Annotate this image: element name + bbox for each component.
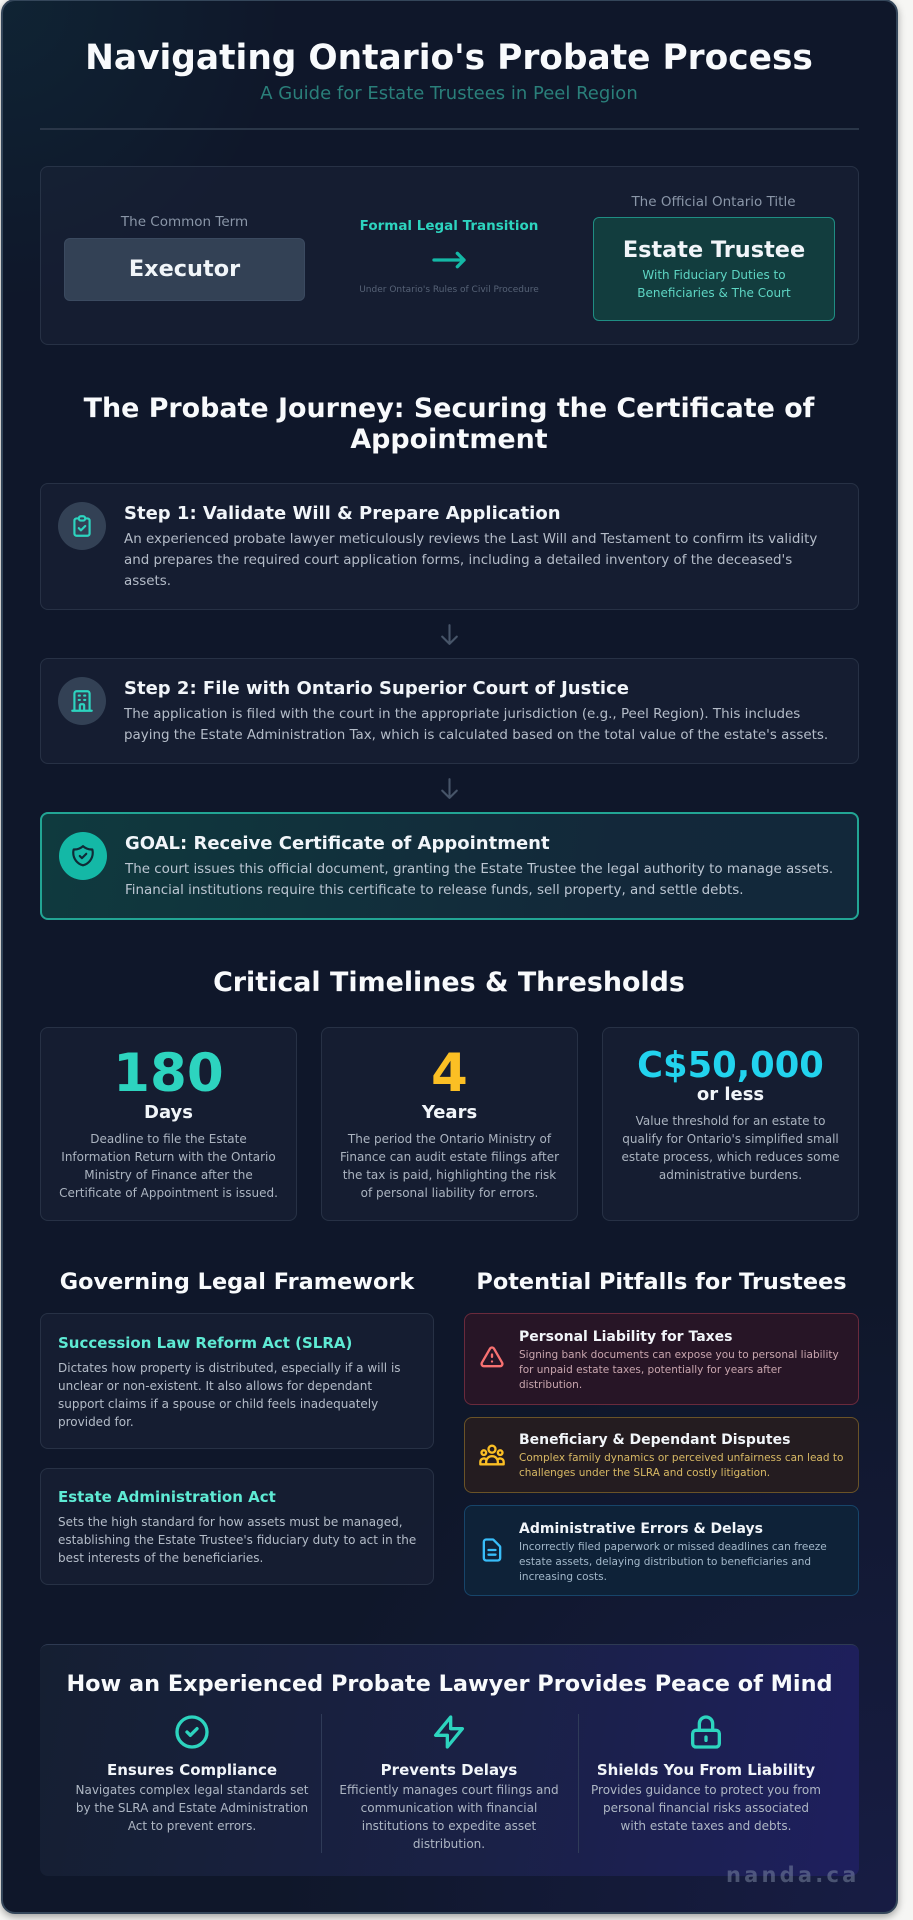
icon: check circle	[175, 1715, 209, 1749]
icon: shield check	[59, 832, 107, 880]
number C$50,000: C$50,000	[637, 1045, 824, 1086]
icon: warning triangle	[480, 1346, 504, 1368]
pitfall text: Incorrectly filed paperwork or missed deadlines can freeze	[519, 1541, 827, 1553]
benefit: ensures compliance	[75, 1715, 309, 1833]
benefit text: distribution.	[413, 1837, 485, 1851]
description: administrative burdens.	[659, 1168, 802, 1182]
unit days: Days	[144, 1102, 193, 1123]
description: Certificate of Appointment is issued.	[59, 1186, 278, 1200]
description: qualify for Ontario's simplified small	[622, 1132, 839, 1146]
icon: lock	[691, 1715, 721, 1749]
step 1 text: An experienced probate lawyer meticulously reviews the Last Will and Testament to confirm its validity	[124, 532, 817, 547]
heading: critical timelines: Critical Timelines & Thresholds	[213, 967, 685, 998]
act title: Estate Administration Act	[58, 1488, 276, 1506]
benefit title: Shields You From Liability	[597, 1761, 815, 1779]
heading: potential pitfalls: Potential Pitfalls for Trustees	[476, 1269, 847, 1295]
pitfall: administrative errors	[464, 1505, 859, 1596]
act text	[58, 1361, 401, 1429]
icon: right arrow	[432, 252, 466, 268]
pitfall text: increasing costs.	[519, 1571, 607, 1583]
benefit title: Ensures Compliance	[107, 1761, 277, 1779]
icon: court building	[58, 677, 106, 725]
pitfall text	[519, 1541, 827, 1583]
arrow down	[441, 778, 458, 799]
benefit title: Prevents Delays	[381, 1761, 517, 1779]
box: executor: Executor	[129, 256, 240, 282]
benefit: prevents delays	[339, 1715, 559, 1851]
pitfall title: Beneficiary & Dependant Disputes	[519, 1432, 790, 1448]
act text: provided for.	[58, 1415, 134, 1429]
benefit text: by the SLRA and Estate Administration	[76, 1801, 308, 1815]
act text: support claims if a spouse or child feels inadequately	[58, 1397, 378, 1411]
panel: step 1	[40, 483, 859, 610]
panel heading: How an Experienced Probate Lawyer Provides Peace of Mind	[66, 1671, 833, 1697]
heading: the probate journey: Appointment	[350, 424, 548, 455]
benefit text: Navigates complex legal standards set	[75, 1783, 309, 1797]
description: The period the Ontario Ministry of	[348, 1132, 551, 1146]
act text	[58, 1515, 416, 1565]
pitfall text: Signing bank documents can expose you to personal liability	[519, 1349, 839, 1361]
stat card: 4 years	[321, 1027, 578, 1221]
goal text: Financial institutions require this certificate to release funds, sell property, and settle debts.	[125, 883, 744, 898]
pitfall: personal liability	[464, 1313, 859, 1405]
icon: clipboard check	[58, 502, 106, 550]
step 2 text: paying the Estate Administration Tax, which is calculated based on the total value of the estate's assets.	[124, 728, 828, 743]
subtitle: A Guide for Estate Trustees in Peel Region	[260, 83, 638, 104]
description: Ministry of Finance after the	[84, 1168, 253, 1182]
pitfall text: distribution.	[519, 1379, 582, 1391]
pitfall text: for unpaid estate taxes, potentially for years after	[519, 1364, 782, 1376]
description: Value threshold for an estate to	[636, 1114, 825, 1128]
icon: lightning bolt	[434, 1715, 464, 1749]
step 1 text: assets.	[124, 574, 171, 589]
description: of personal liability for errors.	[361, 1186, 538, 1200]
act title: Succession Law Reform Act (SLRA)	[58, 1334, 352, 1352]
act text: establishing the Estate Trustee's fiduciary duty to act in the	[58, 1533, 416, 1547]
icon: people group	[479, 1444, 505, 1466]
goal title: GOAL: Receive Certificate of Appointment	[125, 833, 550, 854]
step 1 title: Step 1: Validate Will & Prepare Application	[124, 503, 561, 524]
act text: Sets the high standard for how assets must be managed,	[58, 1515, 403, 1529]
label: formal legal transition: Formal Legal Transition	[360, 218, 538, 234]
box: executor	[64, 238, 305, 301]
step 2 text	[124, 707, 828, 743]
stat card: 180 days	[40, 1027, 297, 1221]
estate trustee heading: Estate Trustee	[623, 237, 805, 263]
description	[59, 1132, 278, 1200]
icon: document	[482, 1538, 502, 1562]
panel: goal	[40, 812, 859, 920]
benefit text: Efficiently manages court filings and	[339, 1783, 559, 1797]
act text: Dictates how property is distributed, especially if a will is	[58, 1361, 401, 1375]
panel: how a lawyer helps	[40, 1644, 859, 1876]
unit or less: or less	[697, 1084, 764, 1105]
description: estate process, which reduces some	[621, 1150, 840, 1164]
benefit text: personal financial risks associated	[603, 1801, 809, 1815]
estate trustee description	[637, 268, 791, 300]
step 2 title: Step 2: File with Ontario Superior Court of Justice	[124, 678, 629, 699]
benefit: shields from liability	[591, 1715, 821, 1833]
watermark: nanda.ca	[726, 1863, 859, 1887]
step 2 text: The application is filed with the court in the appropriate jurisdiction (e.g., Peel Region). This includes	[124, 707, 800, 722]
pitfall title: Personal Liability for Taxes	[519, 1329, 733, 1345]
act text: unclear or non-existent. It also allows for dependant	[58, 1379, 372, 1393]
pitfall text	[519, 1349, 839, 1391]
label: the official ontario title: The Official Ontario Title	[631, 194, 796, 210]
stat card: C$50,000	[602, 1027, 859, 1221]
goal text	[124, 862, 833, 898]
benefit text: Provides guidance to protect you from	[591, 1783, 821, 1797]
label: the common term: The Common Term	[121, 214, 248, 230]
goal text: The court issues this official document, granting the Estate Trustee the legal authority to manage assets.	[125, 862, 833, 877]
arrow down	[441, 624, 458, 645]
act text: best interests of the beneficiaries.	[58, 1551, 263, 1565]
unit years: Years	[422, 1102, 477, 1123]
pitfall: beneficiary disputes	[464, 1417, 859, 1493]
number 4: 4	[431, 1043, 468, 1104]
description: the tax is paid, highlighting the risk	[343, 1168, 556, 1182]
step 1 text	[124, 532, 817, 589]
estate trustee description: With Fiduciary Duties to	[642, 268, 786, 282]
panel: estate administration act	[40, 1468, 434, 1585]
benefit text: with estate taxes and debts.	[621, 1819, 791, 1833]
panel: step 2	[40, 658, 859, 764]
pitfall title: Administrative Errors & Delays	[519, 1521, 763, 1537]
pitfall text: challenges under the SLRA and costly litigation.	[519, 1467, 770, 1479]
estate trustee description: Beneficiaries & The Court	[637, 286, 791, 300]
step 1 text: and prepares the required court application forms, including a detailed inventory of the deceased's	[124, 553, 792, 568]
description	[340, 1132, 560, 1200]
box: estate trustee	[593, 217, 835, 321]
pitfall text: estate assets, delaying distribution to beneficiaries and	[519, 1556, 811, 1568]
heading: governing legal framework: Governing Legal Framework	[60, 1269, 414, 1295]
description: Finance can audit estate filings after	[340, 1150, 559, 1164]
pitfall text	[519, 1452, 843, 1479]
benefit text: institutions to expedite asset	[362, 1819, 536, 1833]
description: Information Return with the Ontario	[61, 1150, 276, 1164]
description	[621, 1114, 840, 1182]
benefit text: Act to prevent errors.	[128, 1819, 256, 1833]
heading: the probate journey	[84, 393, 815, 455]
pitfall text: Complex family dynamics or perceived unfairness can lead to	[519, 1452, 843, 1464]
number 180: 180	[113, 1043, 224, 1104]
title: Navigating Ontario's Probate Process	[85, 38, 813, 78]
description: Deadline to file the Estate	[90, 1132, 247, 1146]
heading: the probate journey: The Probate Journey: Securing the Certificate of	[84, 393, 814, 424]
benefit text	[591, 1783, 821, 1833]
benefit text	[339, 1783, 559, 1851]
benefit text: communication with financial	[361, 1801, 537, 1815]
benefit text	[75, 1783, 309, 1833]
panel: succession law reform act	[40, 1313, 434, 1449]
note: rules of civil procedure: Under Ontario's Rules of Civil Procedure	[359, 285, 539, 295]
panel: executor to estate trustee transition	[40, 166, 859, 345]
